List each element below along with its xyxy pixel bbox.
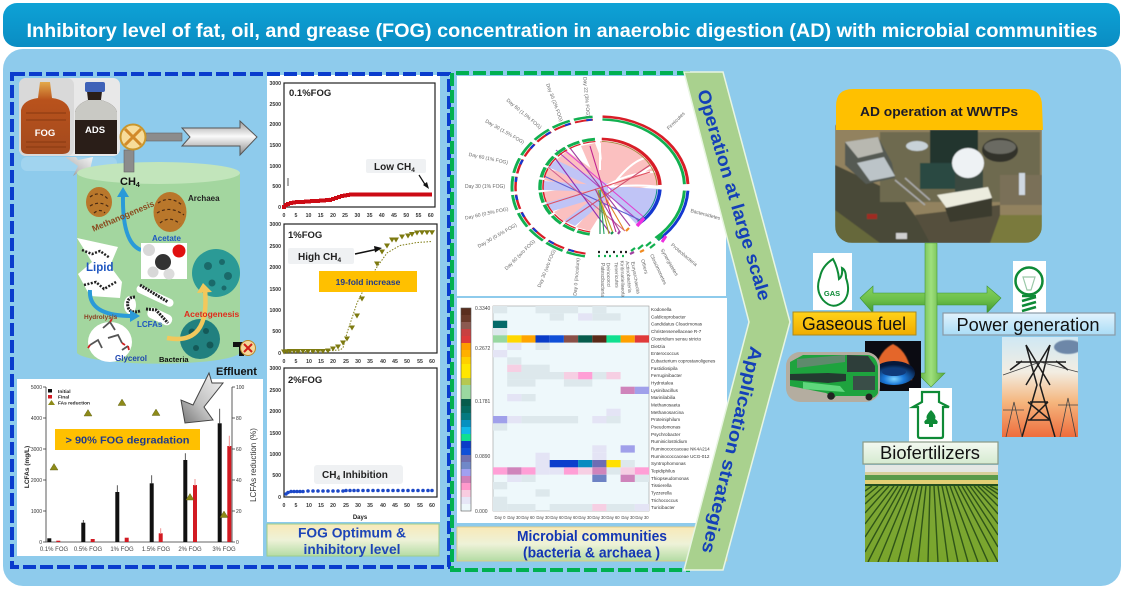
label: Hydrolysis: Hydrolysis [84,314,118,321]
arrow: effluent to degradation [181,373,223,423]
chart: 2% FOG methane: 0 [283,503,286,509]
heatmap genus labels: Pseudomonas [651,424,681,430]
heatmap genus labels: Caldicoprobacter [651,314,686,320]
chart: 1% FOG methane: 1000 [269,308,281,314]
callout: FOG degradation: > 90% FOG degradation [66,434,190,446]
heatmap genus labels: Kodonella [651,307,672,312]
heatmap genus labels: Fastidiosipila [651,366,678,371]
bar legend: Initial [58,389,71,395]
chart: 0.1% FOG methane: 55 [416,213,421,219]
photo: FOG and ADS bottles: FOG [35,128,55,139]
chart: 1% FOG methane: 55 [417,359,423,365]
heatmap sample labels: Day 60 [550,515,564,520]
chord sample labels: Day 30 (2% FOG) [544,83,564,123]
heatmap genus labels: Ruminococcaceae NK4A214 [651,446,710,452]
chart: 2% FOG methane: 35 [367,503,373,509]
heatmap genus labels: Hydrotalea [651,380,674,386]
heatmap genus labels: Trichococcus [651,498,679,503]
chord sample labels: Others [639,259,649,275]
small phylum segments [598,218,666,256]
callout: High CH4 [288,246,382,264]
chart: 0.1% FOG methane: 3000 [269,81,281,87]
chart: 1% FOG methane: 2000 [269,265,281,271]
chart: 1% FOG methane: 35 [367,359,373,365]
heatmap colour legend: 0.0890 [475,454,491,460]
label: microbial communities [457,527,727,562]
icon: bacteria upper [192,249,240,297]
chord sample labels: Day 30 (1.5% FOG) [484,118,525,146]
chevron arrow [684,72,790,570]
label: Effluent: Effluent [216,366,257,378]
heatmap genus labels: Methanosaeta [651,402,681,408]
arrow: feed into digester [65,157,93,178]
heatmap genus labels: Enterococcus [651,351,680,356]
chart: 2% FOG methane: 5 [295,503,298,509]
chart: LCFAs bar chart: 80 [236,416,242,422]
heatmap sample labels [495,515,649,520]
chart: 1% FOG methane: 500 [272,329,281,335]
callout: Low CH4: 4 [411,167,415,174]
chart: 0.1% FOG methane: 500 [272,184,281,190]
heatmap sample labels: Day 30 [621,515,635,520]
chord sample labels: Day 0 (inoculum) [572,257,582,296]
ribbons [543,141,660,234]
chart: 2% FOG methane: 500 [272,473,281,479]
chord sample labels: Bacteroidetes [690,208,721,222]
chart: 0.1% FOG methane: 30 [355,213,360,219]
gas pipes [124,133,182,172]
chart: LCFAs bar chart: 0 [236,540,239,546]
chart: 1% FOG methane: 5 [295,359,298,365]
text: application strategies: Application strategies [698,345,766,555]
effluent valve [233,340,256,356]
arrow: to methane [117,187,141,250]
chord sample labels: Day 30 (1% FOG) [465,184,505,190]
heatmap genus labels: Dietzia [651,344,665,349]
photo: AD operation at WWTPs [835,89,1043,243]
chart: LCFAs bar chart: 20 [236,509,242,515]
heatmap panel [457,298,727,523]
chart: 2% FOG methane: 3000 [269,366,281,372]
heatmap grid [493,306,649,511]
final bars [56,446,231,542]
chart: 2% FOG methane: 2000 [269,409,281,415]
chart: 1% FOG methane: 1500 [269,287,281,293]
chart: 2% FOG methane: 50 [404,503,410,509]
callout: CH4 inhibition: Inhibition [340,470,388,481]
chart: 0.1% FOG methane [269,81,435,219]
chart: LCFAs bar chart: 4000 [31,416,42,422]
icon: light bulb [1013,261,1046,313]
photo: crop field [865,465,998,562]
heatmap genus labels: Ruminococcaceae UCG-012 [651,454,710,459]
chord sample labels: Euryarchaeota [629,261,641,295]
heatmap genus labels: Ferruginibacter [651,373,682,378]
chart: 2% FOG methane [269,366,437,521]
label: FOG optimum and inhibitory level: FOG Optimum & [298,526,406,540]
heatmap colour legend: 0.000 [475,509,488,515]
heatmap genus labels [651,307,716,510]
chart: LCFAs bar chart: 100 [236,385,245,391]
chord sample labels: Synergistetes [659,248,679,278]
chart: LCFAs bar chart: 5000 [31,385,42,391]
label: gaseous fuel: Gaseous fuel [802,314,906,334]
icon: gas valve [120,124,146,150]
heatmap genus labels: Turicibacter [651,505,675,510]
chart: 0.1% FOG methane: 0 [278,205,281,211]
chart: 2% FOG methane: 45 [392,503,398,509]
heatmap genus labels: Christensenellaceae R-7 [651,329,702,334]
callout: 19-fold increase [319,271,417,292]
icon: bacteria lower [180,319,220,359]
chart: 0.1% FOG methane: 0 [283,213,286,219]
chart: 2% FOG methane: 15 [318,503,324,509]
label: Acetogenesis: Acetogenesis [184,309,240,319]
glycerol molecules [88,319,132,362]
arrow: acetogenesis [167,283,212,339]
heatmap genus labels: Eubacterium coprostanoligenes [651,358,716,364]
heatmap genus labels: Methanosarcina [651,410,684,415]
chart: LCFAs bar chart: 2% FOG [178,547,202,553]
chart: 0.1% FOG methane: 60 [428,213,434,219]
label: biofertilizers [863,442,998,464]
chart: 2% FOG methane: 2%FOG [288,375,322,386]
heatmap genus labels: Psychrobacter [651,432,681,437]
photo: green bus [786,352,880,402]
chart: 1% FOG methane: 45 [392,359,398,365]
label: Bacteria: Bacteria [159,355,189,364]
LCFA chains [124,284,175,327]
chart: 1% FOG methane: 25 [343,359,349,365]
heatmap sample labels: Day 60 [521,515,535,520]
icon: gas flame: GAS [824,289,840,298]
chart: 0.1% FOG methane: 15 [318,213,324,219]
chart: 0.1% FOG methane: 1000 [269,164,281,170]
green dashed frame [452,73,690,570]
chart: LCFAs bar chart: 2000 [31,478,42,484]
chart: 2% FOG methane: 30 [355,503,361,509]
chart: LCFAs bar chart: 0.1% FOG [40,547,69,553]
chart: LCFAs bar chart: LCFAs reduction (%) [249,428,258,502]
callout: High CH4: 4 [337,257,341,264]
heatmap colour legend [461,306,491,515]
chart: 0.1% FOG methane: 10 [306,213,311,219]
heatmap genus labels: Marinilabilia [651,395,676,400]
chord sample labels: Day 60 (1% FOG) [468,152,509,166]
panel: FOG process and optimum [17,75,440,557]
heatmap colour legend: 0.2672 [475,346,491,352]
chart: LCFAs bar chart: LCFAs (mg/L) [24,446,31,488]
heatmap genus labels: Ruminiclostridium [651,439,687,444]
label: Archaea: Archaea [188,194,220,203]
photo: AD operation at WWTPs: AD operation at WWTPs [860,105,1018,119]
heatmap colour legend: 0.1781 [475,399,491,405]
chord sample labels [465,77,721,298]
chart: 2% FOG methane: 2500 [269,388,281,394]
arrow: biogas outlet [182,121,257,155]
arrow: horizontal green double arrow [860,286,1001,313]
chart: 2% FOG methane: 60 [429,503,435,509]
icon: biofertilizer bottle [909,388,952,442]
label: FOG optimum and inhibitory level [267,524,439,557]
label: microbial communities: (bacteria & archaea ) [523,546,660,562]
lipid molecules [77,238,122,298]
chord sample labels: Deinococci [605,263,611,287]
chart: LCFAs bar chart: 40 [236,478,242,484]
chord rings [512,117,688,257]
heatmap genus labels: Tissierella [651,483,672,488]
chart: 2% FOG methane: 10 [306,503,312,509]
label: LCFAs: LCFAs [137,320,163,329]
heatmap genus labels: Syntrophomonas [651,461,686,466]
bar legend: Final [58,394,69,400]
arrow: vertical green arrow [917,243,945,387]
digester tank [77,162,240,364]
label: Glycerol: Glycerol [115,354,147,363]
chart: 1% FOG methane: 40 [380,359,386,365]
chart: LCFAs bar chart: 0.5% FOG [74,547,103,553]
heatmap sample labels: Day 30 [635,515,649,520]
arrow: hydrolysis [90,290,140,322]
photo: gas flame [865,341,921,391]
heatmap sample labels: Day 30 [578,515,592,520]
chart: 0.1% FOG methane: 1500 [269,143,281,149]
reduction markers [50,399,228,518]
chart: LCFAs bar chart: 1% FOG [110,547,134,553]
label: FOG optimum and inhibitory level: inhibitory level [304,542,400,557]
heatmap sample labels: Day 0 [495,515,506,520]
panel: microbial communities [457,76,727,562]
heatmap sample labels: Day 30 [592,515,606,520]
chart: LCFAs bar chart: 1000 [31,509,42,515]
chord sample labels: Day 60 (0.5% FOG) [465,206,509,222]
photo reflection [21,157,117,171]
label: CH4: 4 [136,182,140,189]
callout: CH4 inhibition: CH [322,470,336,481]
photo: FOG and ADS bottles [19,78,120,156]
chart: 0.1% FOG methane: 20 [330,213,336,219]
callout: FOG degradation [55,429,200,450]
chart: 1% FOG methane: 0 [283,359,286,365]
callout: CH4 inhibition: 4 [336,475,340,482]
icon: archaea [86,187,186,232]
chart: 2% FOG methane: 55 [417,503,423,509]
callout: High CH4: High CH [298,252,337,263]
chord sample labels: Cloacimonetes [648,253,668,286]
chart: 2% FOG methane: 0 [278,495,281,501]
chart: 2% FOG methane: Days [353,515,368,521]
chart: 1% FOG methane: 30 [355,359,361,365]
chart: 1% FOG methane: 50 [404,359,410,365]
chord sample labels: Firmicutes [666,111,687,132]
callout: 19-fold increase: 19-fold increase [336,277,401,287]
chart: 0.1% FOG methane: 25 [342,213,348,219]
chord sample labels: Proteobacteria [669,242,698,268]
icon: gas flame [813,253,852,310]
acetate molecule [141,243,187,280]
chart: LCFAs bar chart: 3000 [31,447,42,453]
chart: 0.1% FOG methane: 35 [367,213,373,219]
chart: 2% FOG methane: 25 [343,503,349,509]
text: operation at large scale: Operation at large scale [693,87,775,303]
label: CH4: CH [120,176,136,188]
chart: 1% FOG methane: 60 [429,359,435,365]
header: AD operation [836,89,1043,130]
chart: 1% FOG methane: 20 [330,359,336,365]
chord sample labels: Day 22 (3% FOG) [581,77,591,117]
heatmap genus labels: Tepidiphilus [651,468,676,474]
chord sample labels: Day 30 (w/o FOG) [537,248,558,289]
heatmap sample labels: Day 60 [606,515,620,520]
chart: LCFAs bar chart: 1.5% FOG [142,547,171,553]
label: Methanogenesis: Methanogenesis [90,198,156,234]
chart: 1% FOG methane: 10 [306,359,312,365]
chart: 0.1% FOG methane: 2000 [269,122,281,128]
label: Acetate: Acetate [152,234,181,243]
chart: 0.1% FOG methane: 40 [379,213,385,219]
chart: LCFAs bar chart: 0 [39,540,42,546]
initial bars [47,423,222,542]
chart: 2% FOG methane: 1000 [269,452,281,458]
chart: LCFAs bar chart: 3% FOG [212,547,236,553]
chart: 1% FOG methane [269,222,437,365]
heatmap genus labels: Thiopseudomonas [651,476,689,481]
label: biofertilizers: Biofertilizers [880,443,980,463]
callout: Low CH4: Low CH [374,162,411,173]
chart: 0.1% FOG methane: 50 [403,213,409,219]
chart: 0.1% FOG methane: 45 [391,213,397,219]
heatmap genus labels: Clostridium sensu stricto [651,336,701,342]
heatmap sample labels: Day 30 [507,515,521,520]
chord sample labels: Tenericutes [613,262,619,288]
chart: 0.1% FOG methane: 0.1%FOG [289,88,331,99]
white panel behind methane charts [267,75,440,522]
bar legend: FAs reduction [58,400,90,406]
label: microbial communities: Microbial communities [517,529,667,545]
heatmap genus labels: Proteiniphilum [651,417,680,422]
chart: 2% FOG methane: 20 [330,503,336,509]
heatmap sample labels: Day 60 [564,515,578,520]
chart: 2% FOG methane: 40 [380,503,386,509]
label: Lipid: Lipid [86,262,113,274]
heatmap genus labels: Tyzzerella [651,490,672,496]
chord sample labels: Day 60 (w/o FOG) [504,239,537,272]
chord sample labels: Patescibacteria [599,263,605,297]
chart: 1% FOG methane: 3000 [269,222,281,228]
heatmap genus labels: Candidatus Cloacimonas [651,322,703,326]
chord sample labels: Day 60 (1.5% FOG) [505,98,543,131]
chart: 1% FOG methane: 15 [318,359,324,365]
chart: 1% FOG methane: 1%FOG [288,230,322,241]
chord sample labels: Kiritimatiellaeota [618,261,626,298]
blue dashed frame [12,74,449,567]
chart: LCFAs bar chart [17,379,263,556]
chart: 1% FOG methane: 0 [278,351,281,357]
chart: 0.1% FOG methane: 5 [295,213,298,219]
chord diagram [457,76,726,298]
heatmap colour legend: 0.3340 [475,306,491,312]
title banner: Inhibitory level of fat, oil, and grease (FOG) concentration in anaerobic digestion (AD) with microbial communities [26,20,1098,42]
chart: 0.1% FOG methane: 2500 [269,102,281,108]
chord sample labels: Actinobacteria [624,261,632,293]
callout: CH4 inhibition [314,465,403,484]
chord sample labels: Day 30 (0.5% FOG) [477,222,518,250]
heatmap genus labels: Lysinibacillus [651,388,679,393]
heatmap sample labels: Day 30 [536,515,550,520]
photo: power pylons [1002,337,1082,437]
photo: FOG and ADS bottles: ADS [85,125,105,136]
chart: 1% FOG methane: 2500 [269,244,281,250]
title banner [3,3,1120,47]
label: power generation: Power generation [956,315,1100,335]
chart: 2% FOG methane: 1500 [269,431,281,437]
callout: Low CH4 [366,159,429,189]
chart: LCFAs bar chart: 60 [236,447,242,453]
bar legend [48,389,90,406]
